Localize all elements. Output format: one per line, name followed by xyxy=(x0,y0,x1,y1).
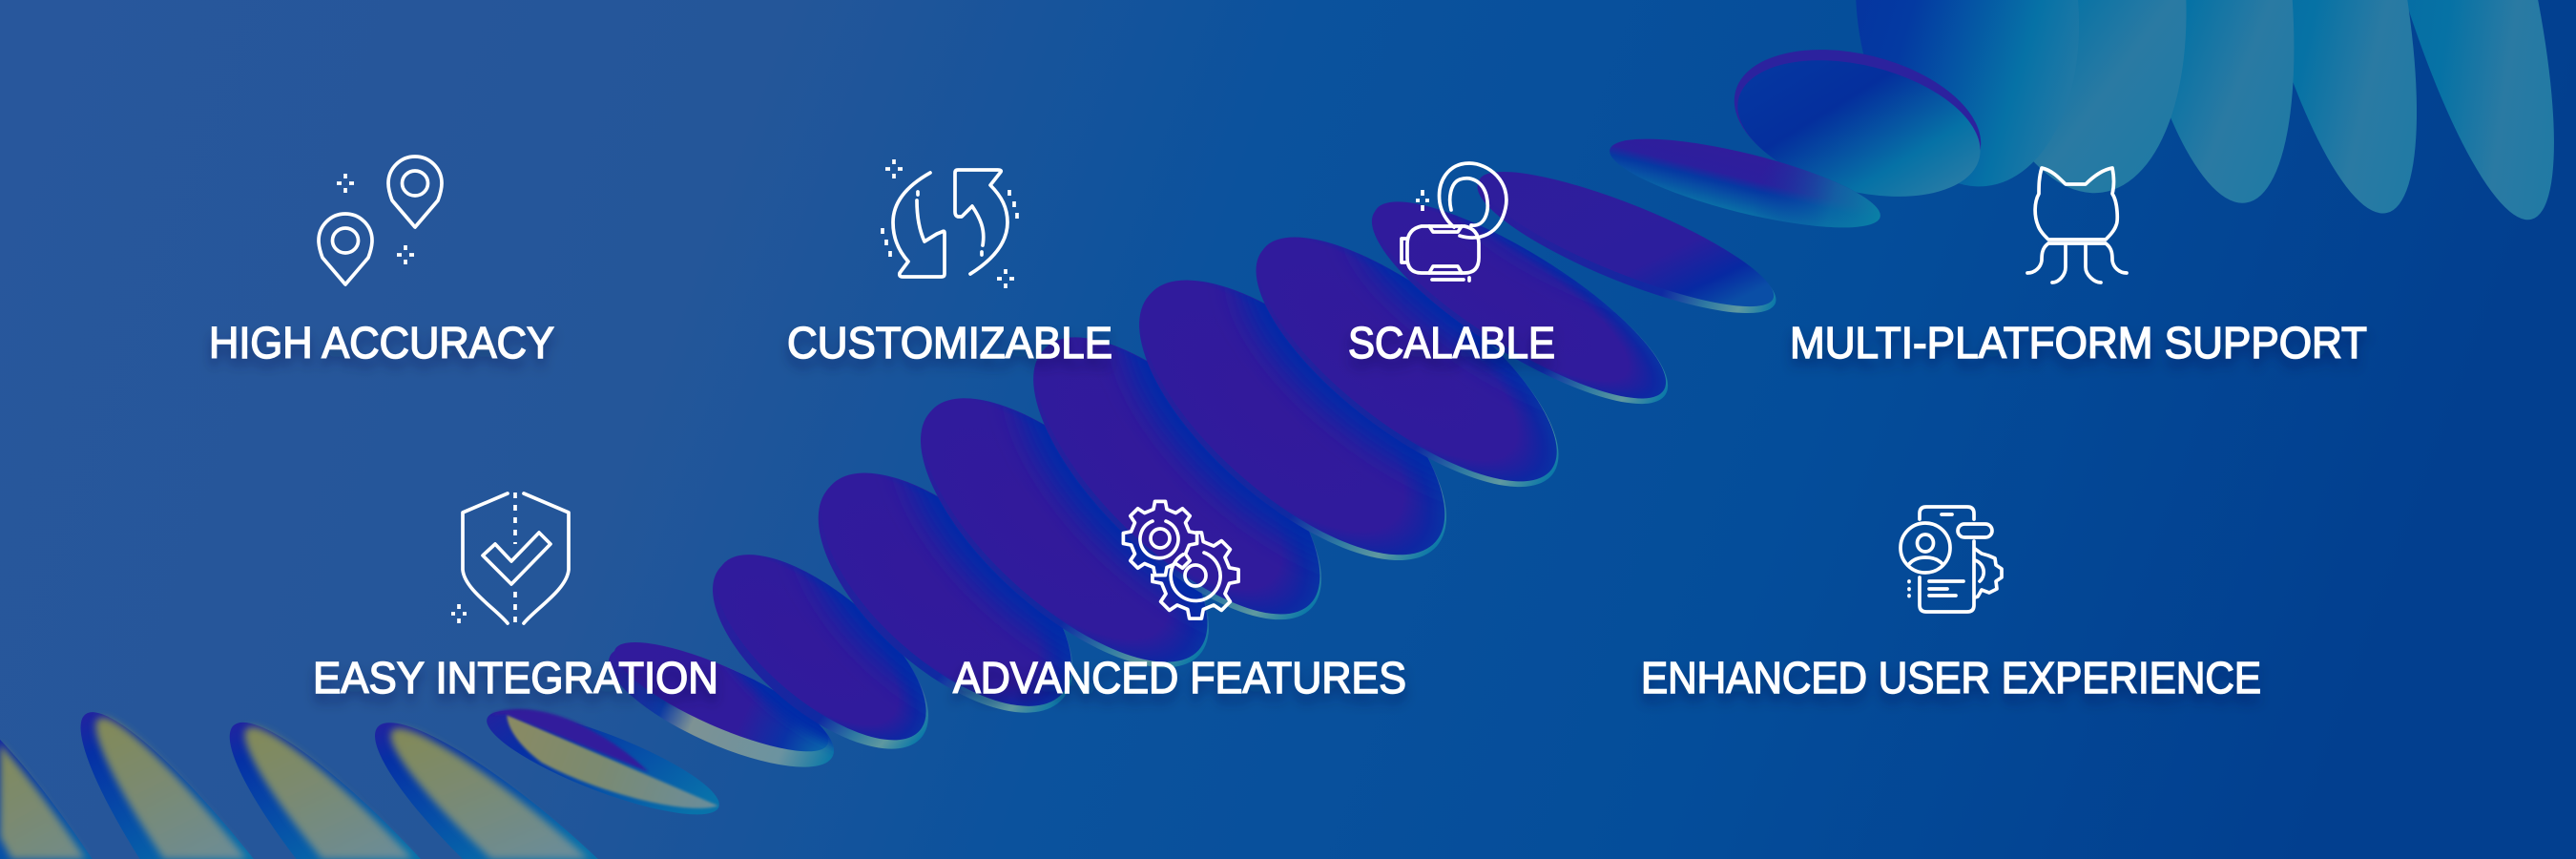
icon: sync arrows xyxy=(883,159,1017,288)
icon: gears xyxy=(1123,501,1238,618)
feature: advanced features xyxy=(953,501,1406,702)
feature: high accuracy xyxy=(209,157,554,367)
icon: octocat outline xyxy=(2027,168,2127,283)
icon: shield with check xyxy=(451,492,569,626)
ribbon of discs: lower left xyxy=(0,708,719,859)
label: scalable: SCALABLE xyxy=(1348,318,1555,367)
icon: VR headset with ring xyxy=(1402,163,1506,281)
feature: multi-platform support xyxy=(1790,168,2367,367)
icon: location pins xyxy=(319,157,442,284)
feature: scalable xyxy=(1348,163,1555,367)
label: advanced features: ADVANCED FEATURES xyxy=(953,653,1406,702)
feature: enhanced user experience xyxy=(1641,507,2261,702)
icon: phone with user profile xyxy=(1901,507,2002,612)
ribbon of discs: top right fan xyxy=(1719,0,2576,237)
label: high accuracy: HIGH ACCURACY xyxy=(209,318,554,367)
label: enhanced user experience: ENHANCED USER EXPERIENCE xyxy=(1641,653,2261,702)
feature: customizable xyxy=(787,159,1112,367)
label: multi-platform support: MULTI-PLATFORM SUPPORT xyxy=(1790,318,2367,367)
feature: easy integration xyxy=(313,492,718,702)
ribbon of discs: centre diagonal xyxy=(594,121,1887,791)
label: customizable: CUSTOMIZABLE xyxy=(787,318,1112,367)
label: easy integration: EASY INTEGRATION xyxy=(313,653,718,702)
